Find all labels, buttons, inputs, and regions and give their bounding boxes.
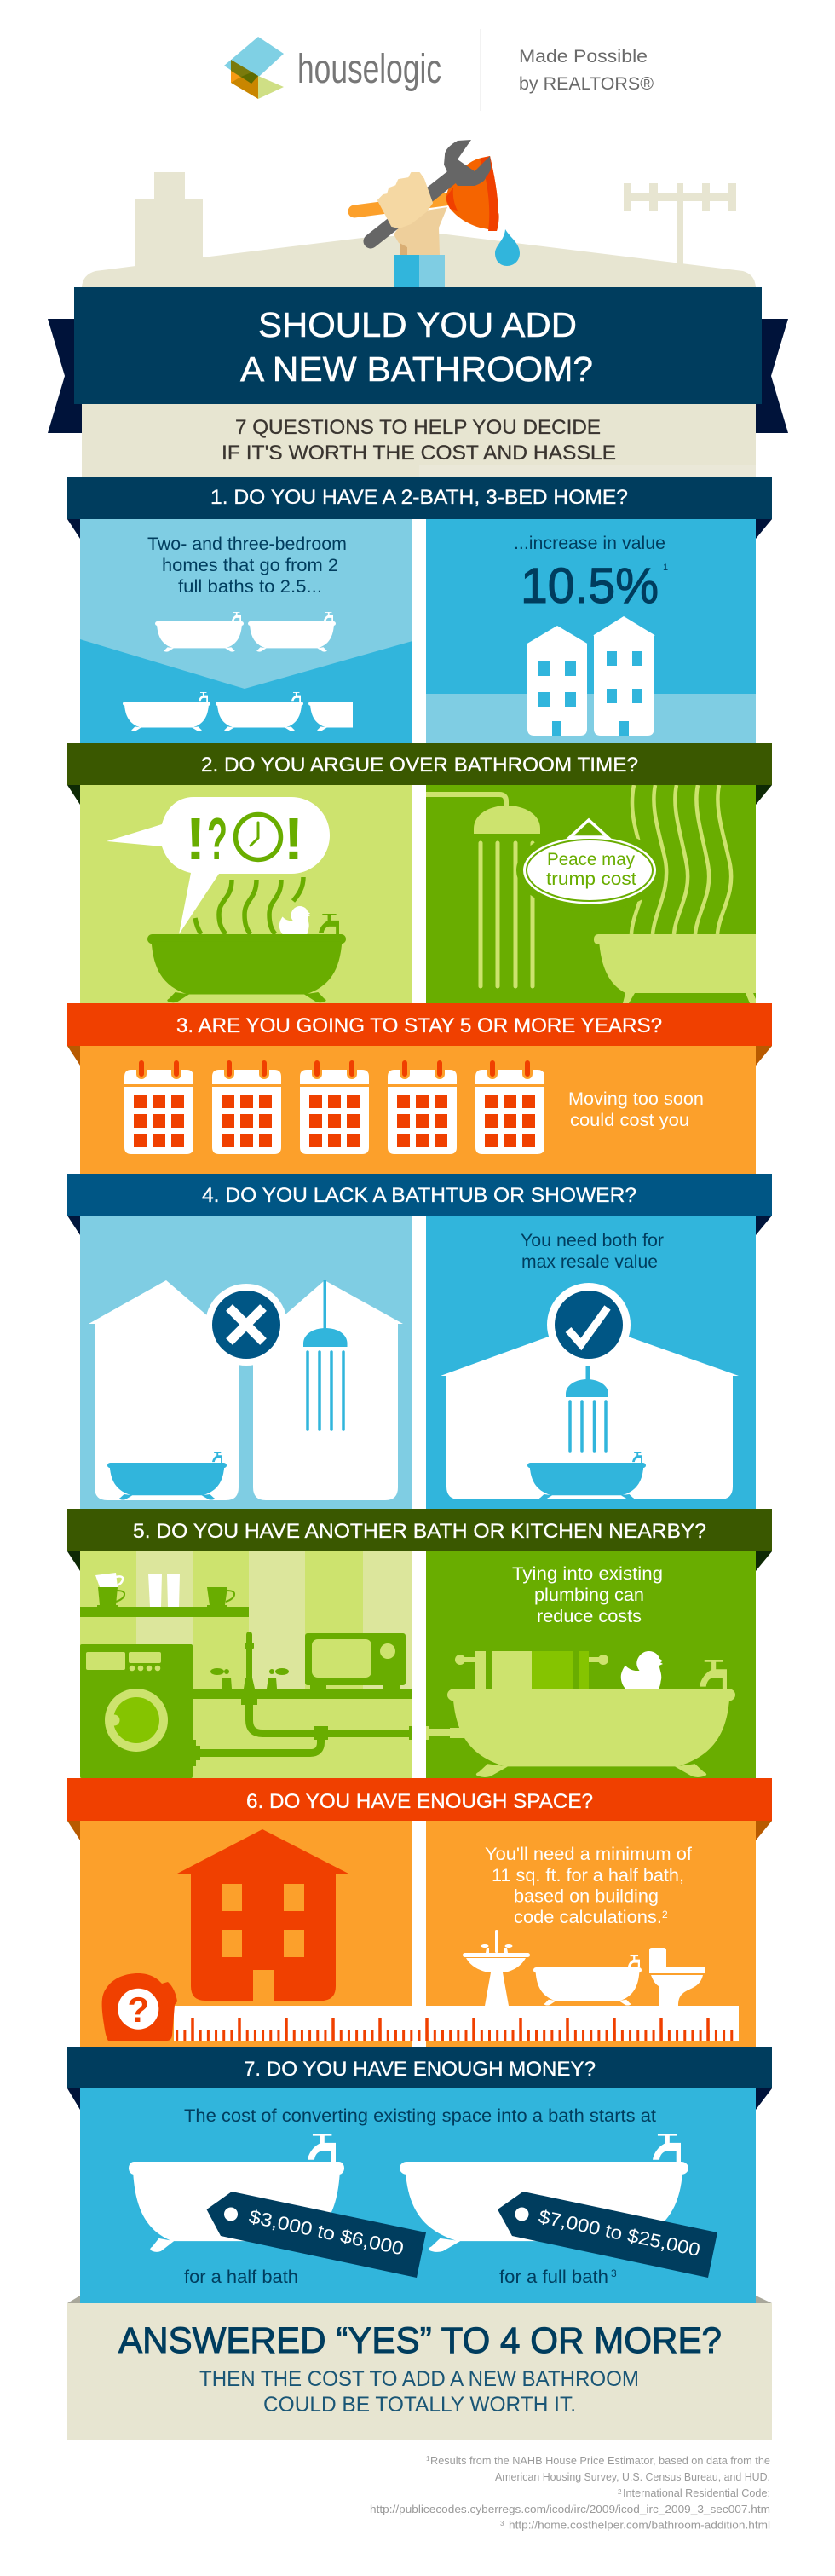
icon: faucet <box>700 1660 727 1689</box>
text: tying into existing plumbing <box>512 1564 663 1626</box>
icon: house with shower, no tub <box>253 1280 403 1500</box>
banner: question 7: 7. DO YOU HAVE ENOUGH MONEY? <box>244 2058 596 2081</box>
conclusion panel: COULD BE TOTALLY WORTH IT. <box>263 2393 576 2417</box>
footnotes: American Housing Survey, U.S. Census Bureau, and HUD. <box>495 2470 770 2483</box>
tagline: by REALTORS® <box>519 74 654 94</box>
text: minimum space: 11 sq. ft. for a half bath, <box>492 1866 684 1886</box>
text: two and three bedroom: full baths to 2.5... <box>178 577 322 597</box>
icon: full bath tub <box>400 2134 688 2252</box>
speech bubble: ! <box>284 806 303 872</box>
text: two and three bedroom <box>147 534 347 597</box>
footnotes: 3 <box>500 2520 504 2527</box>
icon: five calendars <box>124 1060 544 1154</box>
footnotes: International Residential Code: <box>623 2486 770 2499</box>
illustration: hand with wrench and plunger <box>354 140 520 287</box>
text: tying into existing plumbing: reduce costs <box>537 1607 642 1626</box>
icon: tape measure ruler: ? <box>127 1990 149 2030</box>
section 5 right panel <box>426 1551 756 1778</box>
text: minimum space <box>485 1845 692 1927</box>
icon: washing machine <box>80 1644 200 1778</box>
banner: question 1: 1. DO YOU HAVE A 2-BATH, 3-BED HOME? <box>210 486 628 509</box>
speech bubble: ! <box>186 806 205 872</box>
section 4 right panel <box>426 1216 756 1509</box>
icon: bathtub <box>533 1955 642 2006</box>
text: tying into existing plumbing: plumbing can <box>534 1585 644 1605</box>
price tag: half bath: $3,000 to $6,000 <box>247 2205 406 2259</box>
icon: check mark <box>547 1283 631 1366</box>
footnotes: 2 <box>618 2488 622 2496</box>
banner: question 4 <box>67 1174 772 1235</box>
sign: peace may trump cost <box>516 820 663 912</box>
icon: house <box>177 1829 348 2001</box>
icon: bathtub <box>594 934 756 1003</box>
sign: peace may trump cost: trump cost <box>546 869 636 889</box>
steam lines <box>631 785 731 934</box>
icon: rubber duck <box>621 1651 663 1689</box>
text: moving too soon: Moving too soon <box>568 1089 704 1109</box>
conclusion panel: ANSWERED “YES” TO 4 OR MORE? <box>118 2320 722 2361</box>
text: minimum space: 2 <box>662 1909 668 1920</box>
logo: houselogic <box>224 37 441 99</box>
footnotes: Results from the NAHB House Price Estimator, based on data from the <box>430 2454 770 2467</box>
icon: x mark <box>205 1284 287 1366</box>
text: you need both: You need both for <box>521 1231 664 1250</box>
icon: two houses <box>526 616 655 736</box>
banner: question 2 <box>67 743 772 805</box>
label: full bath: for a full bath <box>499 2267 608 2287</box>
text: minimum space: based on building <box>514 1887 659 1906</box>
icon: bathtub with pipe <box>426 1689 735 1777</box>
icon: bathtub <box>147 934 346 1002</box>
icon: house with tub, no shower <box>89 1280 239 1500</box>
tagline <box>519 47 654 94</box>
banner: question 5 <box>67 1509 772 1571</box>
section 7 panel: 3 <box>611 2267 617 2279</box>
conclusion panel: THEN THE COST TO ADD A NEW BATHROOM <box>199 2367 639 2391</box>
icon: microwave <box>305 1633 406 1689</box>
house roof silhouette with chimney and antenna <box>82 172 756 287</box>
section 2 left panel <box>80 785 412 1003</box>
icon: half bath tub <box>129 2134 344 2252</box>
label: half bath: for a half bath <box>184 2267 298 2287</box>
speech bubble: ? <box>207 806 227 872</box>
text: cost of converting: The cost of converting existing space into a bath starts at <box>184 2106 656 2126</box>
icon: rubber duck <box>279 906 310 934</box>
steam lines <box>195 877 303 934</box>
title ribbon: A NEW BATHROOM? <box>240 349 593 389</box>
title ribbon: SHOULD YOU ADD <box>258 305 577 344</box>
sign: peace may trump cost: Peace may <box>547 850 635 869</box>
banner: question 4: 4. DO YOU LACK A BATHTUB OR SHOWER? <box>202 1184 636 1207</box>
counter and pipes <box>193 1689 412 1753</box>
banner: question 6 <box>67 1778 772 1840</box>
banner: question 6: 6. DO YOU HAVE ENOUGH SPACE? <box>246 1790 593 1813</box>
section 7 panel <box>80 2088 756 2303</box>
icon: house with tub and shower <box>441 1337 739 1500</box>
banner: question 5: 5. DO YOU HAVE ANOTHER BATH OR KITCHEN NEARBY? <box>133 1520 706 1543</box>
title ribbon <box>48 287 788 433</box>
conclusion panel <box>67 2296 772 2440</box>
subtitle panel: IF IT'S WORTH THE COST AND HASSLE <box>222 442 616 465</box>
icon: faucet <box>319 914 339 934</box>
footnotes: http://publicecodes.cyberregs.com/icod/irc/2009/icod_irc_2009_3_sec007.htm <box>370 2503 770 2515</box>
section 5 left panel: kitchen <box>80 1551 412 1778</box>
tagline: Made Possible <box>519 47 648 66</box>
icon: sink <box>463 1930 530 2006</box>
subtitle panel <box>82 404 756 477</box>
text: moving too soon <box>568 1089 704 1130</box>
icon: faucet <box>210 1632 289 1689</box>
icon: two bathtubs <box>155 612 336 652</box>
banner: question 7 <box>67 2047 772 2110</box>
banner: question 1 <box>67 477 772 539</box>
text: two and three bedroom: Two- and three-bedroom <box>147 534 347 554</box>
banner: question 3 <box>67 1003 772 1066</box>
text: you need both <box>521 1231 664 1272</box>
icon: water drop <box>495 229 520 266</box>
price tag: full bath: $7,000 to $25,000 <box>537 2205 702 2261</box>
text: two and three bedroom: homes that go from 2 <box>162 556 338 575</box>
subtitle panel: 7 QUESTIONS TO HELP YOU DECIDE <box>235 416 601 439</box>
text: minimum space: You'll need a minimum of <box>485 1845 692 1864</box>
icon: two and a half bathtubs <box>123 692 353 731</box>
price tag: half bath <box>206 2192 426 2278</box>
icon: clock <box>235 815 281 859</box>
text: minimum space: code calculations. <box>514 1908 662 1927</box>
text: you need both: max resale value <box>521 1252 658 1272</box>
footnotes: http://home.costhelper.com/bathroom-addition.html <box>509 2518 770 2532</box>
footnotes <box>370 2454 770 2532</box>
icon: toilet <box>649 1948 705 2006</box>
speech bubble <box>107 797 330 934</box>
icon: shower <box>426 794 540 986</box>
banner: question 3: 3. ARE YOU GOING TO STAY 5 OR MORE YEARS? <box>176 1014 662 1037</box>
text: tying into existing plumbing: Tying into existing <box>512 1564 663 1584</box>
shelf with cups and glasses <box>80 1573 249 1617</box>
section 3 panel <box>80 1046 756 1174</box>
icon: tape measure ruler <box>102 1973 739 2041</box>
stat: 10.5%: 10.5% <box>521 558 659 614</box>
section 2 right panel <box>426 785 781 1003</box>
section 4 left panel <box>80 1216 412 1509</box>
banner: question 2: 2. DO YOU ARGUE OVER BATHROOM TIME? <box>201 754 638 777</box>
text: moving too soon: could cost you <box>570 1111 689 1130</box>
towel rack and towels <box>455 1651 608 1689</box>
section 6 panels <box>80 1821 756 2047</box>
section 1 panels <box>80 519 756 743</box>
section 1 panels: 1 <box>663 563 668 573</box>
logo: houselogic: houselogic <box>297 47 441 92</box>
footnotes: 1 <box>426 2455 430 2463</box>
text: increase in value: ...increase in value <box>514 534 665 553</box>
price tag: full bath <box>498 2192 717 2278</box>
